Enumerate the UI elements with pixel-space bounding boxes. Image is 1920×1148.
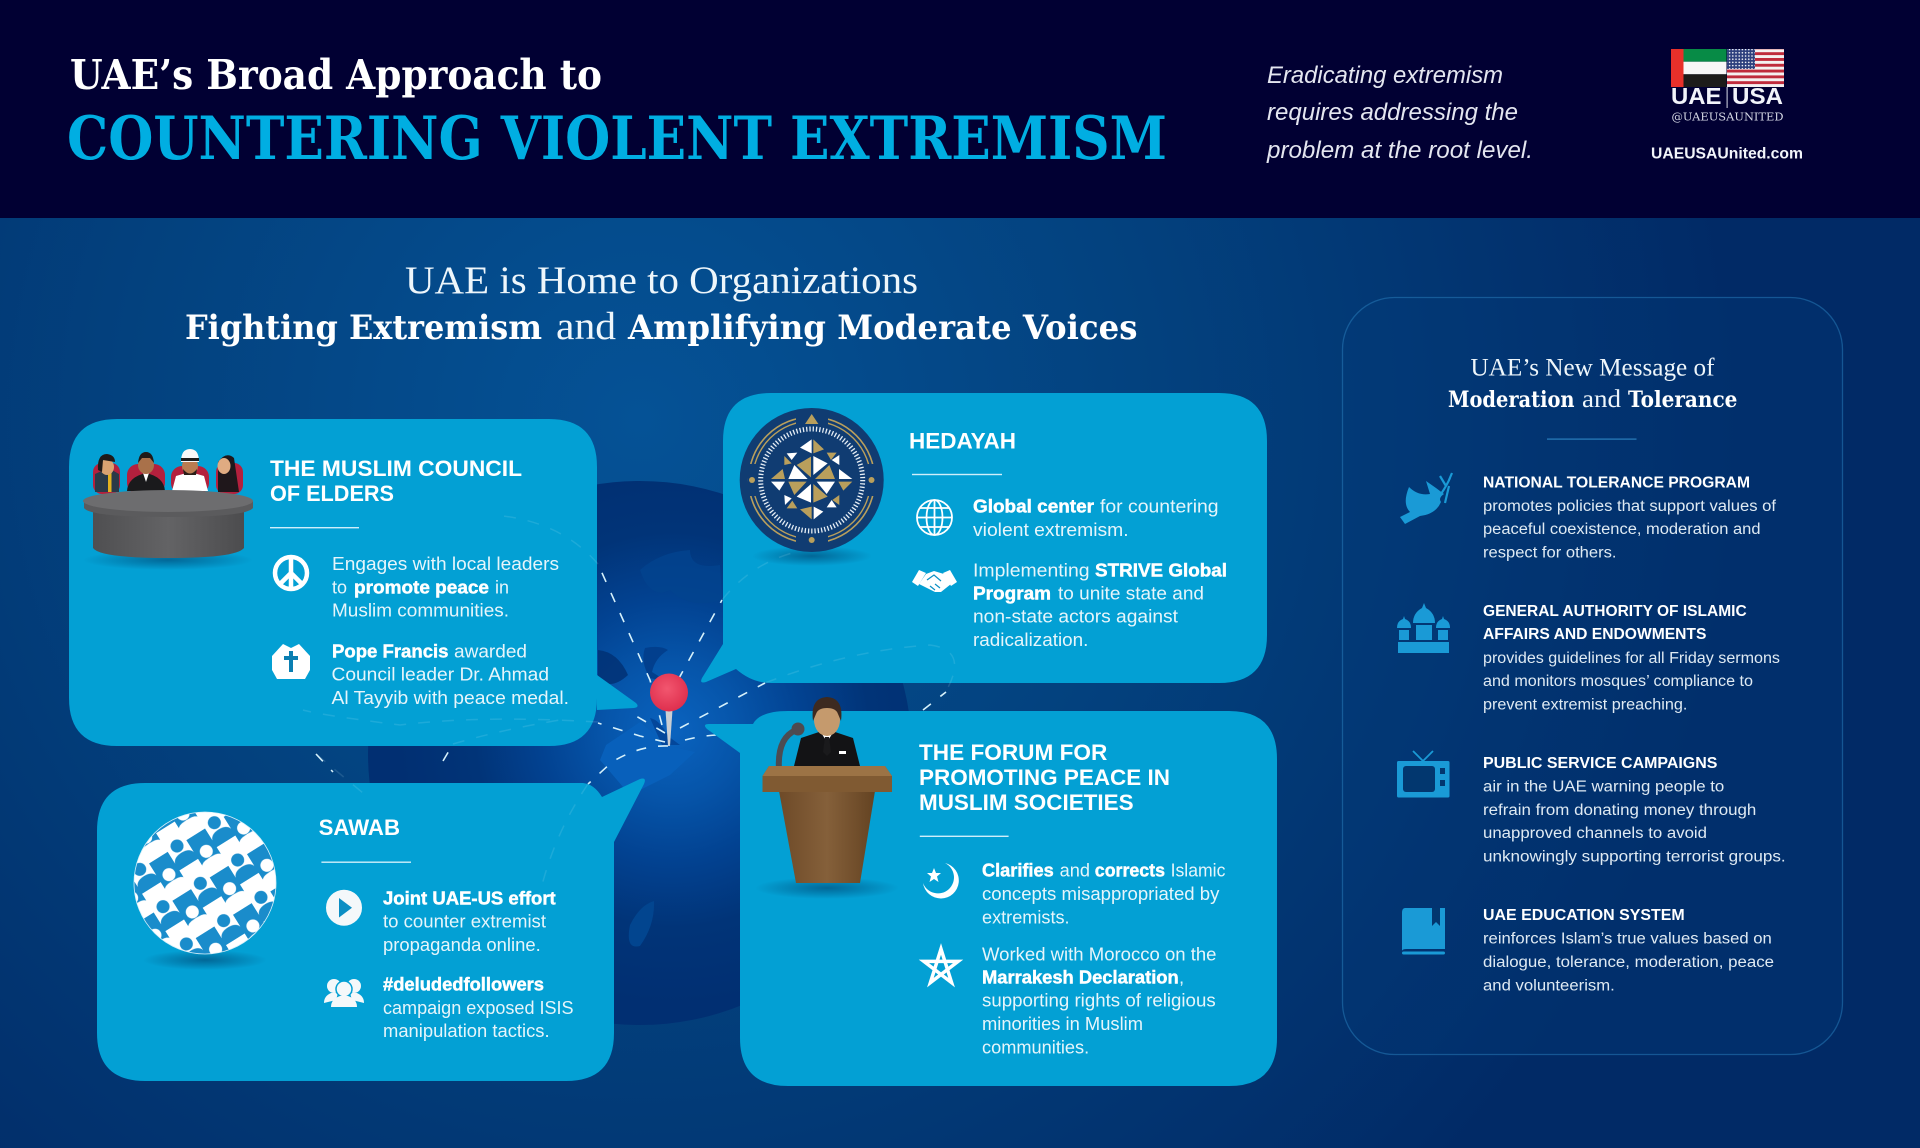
heading: UAE’s New Message of	[1470, 355, 1715, 382]
text: Global center: Global center	[973, 496, 1094, 517]
globe with landmasses	[368, 481, 912, 1025]
text: Public Service Campaigns: PUBLIC SERVICE CAMPAIGNS	[1483, 755, 1717, 772]
icon: papal mitre	[272, 644, 310, 679]
heading: OF ELDERS	[270, 481, 394, 506]
heading: SAWAB	[319, 815, 400, 840]
illustration: Sawab people globe	[134, 812, 276, 970]
dashed connector lines behind panels	[316, 564, 946, 784]
text: Joint UAE-US effort: Joint UAE-US effort	[383, 887, 556, 908]
text: National Tolerance Program: promotes policies that support values of	[1483, 498, 1777, 515]
tagline: problem at the root level.	[1266, 137, 1533, 164]
tagline: Eradicating extremism	[1267, 62, 1503, 89]
text: Clarifies and corrects: concepts misappropriated by	[982, 883, 1220, 904]
heading	[1448, 355, 1737, 440]
heading: and	[1582, 386, 1622, 413]
main heading: and	[556, 305, 617, 348]
map pin	[650, 674, 688, 746]
panel: Sawab	[97, 779, 645, 1081]
main heading: UAE is Home to Organizations	[405, 259, 918, 302]
heading	[919, 740, 1170, 837]
text: promote peace: promote peace	[354, 576, 489, 597]
text: deludedfollowers: #deludedfollowers	[383, 974, 544, 995]
text: promote peace: Muslim communities.	[332, 600, 509, 621]
text: deludedfollowers	[383, 974, 574, 1041]
text: deludedfollowers: manipulation tactics.	[383, 1020, 550, 1041]
panel: The Muslim Council of Elders	[69, 419, 638, 746]
text: STRIVE Global Program: STRIVE Global	[1095, 560, 1227, 581]
text: Pope Francis	[332, 640, 569, 708]
title	[67, 51, 1167, 174]
heading: PROMOTING PEACE IN	[919, 765, 1170, 790]
heading: HEDAYAH	[909, 428, 1016, 453]
text: Joint UAE-US effort	[383, 887, 556, 955]
text: Marrakesh Declaration: Worked with Morocco on the	[982, 944, 1216, 965]
panel: UAE's New Message	[1342, 298, 1842, 1054]
text: UAE Education System: UAE EDUCATION SYSTEM	[1483, 907, 1685, 924]
text: Marrakesh Declaration: Marrakesh Declaration	[982, 966, 1179, 987]
text: Global center: violent extremism.	[973, 519, 1129, 540]
illustration: Hedayah emblem	[740, 408, 884, 566]
faint connector arcs over panels	[303, 515, 955, 907]
text: National Tolerance Program: peaceful coexistence, moderation and	[1483, 521, 1760, 538]
text: General Authority: prevent extremist preaching.	[1483, 696, 1687, 713]
text: Marrakesh Declaration: supporting rights of religious	[982, 990, 1216, 1011]
text: STRIVE Global Program: non-state actors against	[973, 606, 1178, 627]
heading	[270, 456, 522, 528]
heading	[319, 815, 411, 863]
text: Marrakesh Declaration: communities.	[982, 1036, 1089, 1057]
icon: book	[1402, 908, 1445, 954]
text: Marrakesh Declaration: minorities in Muslim	[982, 1013, 1143, 1034]
heading: THE FORUM FOR	[919, 740, 1107, 765]
text: National Tolerance Program: NATIONAL TOLERANCE PROGRAM	[1483, 474, 1750, 492]
icon: globe	[917, 500, 952, 535]
text: Pope Francis: Pope Francis	[332, 640, 448, 661]
text: deludedfollowers: campaign exposed ISIS	[383, 997, 574, 1018]
text: STRIVE Global Program: Implementing	[973, 560, 1090, 581]
logo: UAE USA flags: UAE	[1671, 83, 1722, 109]
text: Pope Francis: Council leader Dr. Ahmad	[332, 664, 549, 685]
text: National Tolerance Program	[1483, 474, 1777, 562]
text: Marrakesh Declaration: ,	[1179, 966, 1184, 987]
icon: play	[326, 890, 362, 926]
text: Global center	[973, 496, 1219, 540]
icon: television	[1397, 751, 1450, 798]
heading: Moderation	[1448, 387, 1574, 413]
header band	[0, 0, 1920, 218]
text: General Authority: AFFAIRS AND ENDOWMENTS	[1483, 626, 1706, 643]
icon: crescent and star	[923, 863, 959, 899]
text: promote peace: to	[332, 576, 347, 597]
tagline: requires addressing the	[1267, 99, 1518, 126]
text: National Tolerance Program: respect for others.	[1483, 545, 1616, 562]
text: Clarifies and corrects: and	[1060, 860, 1090, 881]
icon: dove	[1400, 473, 1452, 524]
logo: UAE USA flags: USA	[1732, 83, 1783, 109]
main heading: Fighting Extremism	[185, 308, 542, 348]
heading: MUSLIM SOCIETIES	[919, 790, 1134, 815]
tagline	[1266, 62, 1533, 164]
main heading: Amplifying Moderate Voices	[627, 308, 1138, 348]
text: Clarifies and corrects: Clarifies	[982, 860, 1054, 881]
title: UAE’s Broad Approach to	[70, 51, 602, 99]
text: Public Service Campaigns: unknowingly supporting terrorist groups.	[1483, 849, 1786, 866]
heading: Tolerance	[1628, 387, 1737, 413]
text: Global center: for countering	[1100, 496, 1219, 517]
text: General Authority: GENERAL AUTHORITY OF ISLAMIC	[1483, 603, 1747, 620]
heading	[909, 428, 1016, 475]
text: STRIVE Global Program	[973, 560, 1227, 650]
text: Joint UAE-US effort: propaganda online.	[383, 934, 541, 955]
text: Marrakesh Declaration	[982, 944, 1216, 1057]
icon: followers	[324, 979, 364, 1007]
text: Public Service Campaigns: unapproved channels to avoid	[1483, 825, 1707, 842]
text: promote peace: in	[495, 576, 509, 597]
illustration: council at table	[83, 449, 253, 570]
text: promote peace	[332, 553, 559, 621]
text: General Authority	[1483, 603, 1780, 713]
text: Pope Francis: awarded	[454, 640, 527, 661]
illustration: speaker at podium	[755, 697, 899, 899]
website: UAEUSAUnited.com	[1651, 146, 1803, 162]
text: UAE Education System: and volunteerism.	[1483, 978, 1615, 994]
text: General Authority: provides guidelines for all Friday sermons	[1483, 650, 1780, 667]
text: UAE Education System: dialogue, tolerance, moderation, peace	[1483, 954, 1774, 971]
logo: UAE USA flags	[1671, 49, 1784, 124]
text: STRIVE Global Program: Program	[973, 582, 1051, 603]
text: UAE Education System	[1483, 907, 1774, 994]
title: COUNTERING VIOLENT EXTREMISM	[67, 104, 1167, 174]
panel: The Forum for Promoting Peace in Muslim Societies	[705, 697, 1277, 1086]
text: Pope Francis: Al Tayyib with peace medal.	[332, 687, 569, 708]
icon: Moroccan star	[924, 949, 958, 983]
text: Clarifies and corrects: extremists.	[982, 906, 1070, 927]
text: promote peace: Engages with local leaders	[332, 553, 559, 574]
icon: handshake	[912, 570, 957, 592]
text: STRIVE Global Program: to unite state and	[1058, 582, 1204, 603]
icon: mosque	[1397, 603, 1450, 653]
text: Clarifies and corrects: Islamic	[1171, 860, 1225, 881]
icon: peace	[275, 557, 307, 589]
text: Clarifies and corrects: corrects	[1095, 860, 1165, 881]
logo: UAE USA flags: @UAEUSAUNITED	[1672, 110, 1784, 124]
heading: THE MUSLIM COUNCIL	[270, 456, 522, 481]
panel: Hedayah	[701, 393, 1267, 683]
text: Public Service Campaigns	[1483, 755, 1786, 866]
text: Joint UAE-US effort: to counter extremist	[383, 911, 546, 932]
text: UAE Education System: reinforces Islam’s true values based on	[1483, 931, 1772, 948]
text: STRIVE Global Program: radicalization.	[973, 629, 1088, 650]
main heading	[185, 259, 1138, 348]
text: Public Service Campaigns: refrain from donating money through	[1483, 802, 1756, 819]
text: General Authority: and monitors mosques’ compliance to	[1483, 673, 1753, 690]
text: Clarifies and corrects	[982, 860, 1225, 927]
text: Public Service Campaigns: air in the UAE warning people to	[1483, 778, 1724, 796]
